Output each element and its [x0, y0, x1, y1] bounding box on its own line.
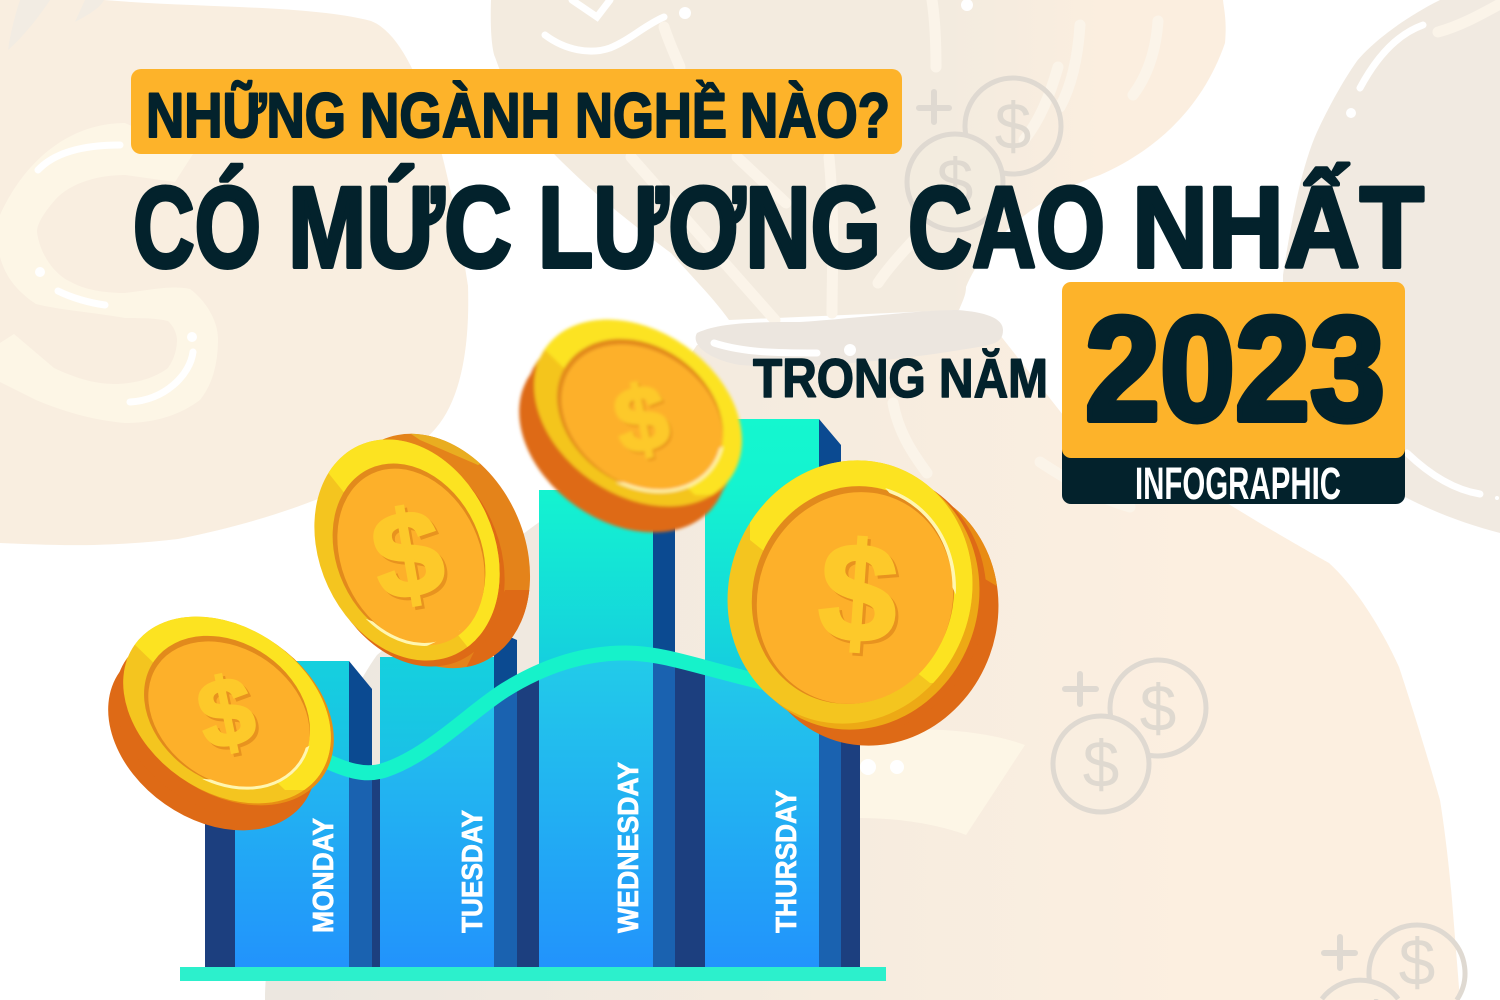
coin 2: $: [362, 482, 453, 627]
icon: dollar coins cluster bottom: [1322, 925, 1465, 1000]
coin 2: [314, 434, 530, 668]
bar: Thursday: THURSDAY: [771, 790, 803, 933]
background: bag top blob: [491, 0, 1226, 320]
background: large dollar S shape: [0, 123, 218, 423]
heading line 1: [146, 80, 890, 151]
coin 3 (blurred): $: [606, 364, 677, 475]
main title line 2: MỨC: [288, 164, 512, 292]
heading line 1: NÀO?: [740, 81, 890, 151]
bar: Monday: [205, 660, 380, 967]
bar: Monday: MONDAY: [308, 818, 340, 933]
bar: Tuesday: TUESDAY: [457, 810, 489, 933]
background: top right blob: [1283, 0, 1500, 533]
background blob: top left: [0, 0, 468, 545]
coin 4: [728, 460, 998, 746]
main title line 2: CAO: [908, 164, 1105, 292]
main title line 2: NHẤT: [1132, 164, 1424, 292]
coin 4: $: [817, 515, 906, 677]
background: bag neck band: [696, 310, 1003, 366]
year badge: [1062, 282, 1405, 509]
bar chart: Monday to Thursday: [180, 419, 886, 981]
coin 3 (blurred): [516, 316, 744, 535]
subtitle: TRONG NĂM: [753, 347, 1048, 409]
heading line 1: NHỮNG: [146, 80, 346, 151]
bar: Tuesday: [380, 630, 539, 967]
coin 1: [108, 616, 334, 830]
background: bag highlights: [545, 0, 1158, 320]
background: white dots: [860, 759, 904, 775]
year number: 2023: [1085, 287, 1385, 452]
coin 1: $: [189, 655, 263, 771]
icon: dollar coins cluster top: $: [995, 89, 1031, 163]
coin 2: $: [365, 485, 456, 630]
coin 4: $: [814, 512, 903, 674]
heading line 1: NGHỀ: [575, 80, 727, 151]
bar: Thursday: [705, 419, 860, 967]
background: neck highlight: [714, 343, 1130, 507]
background: lower paper shape: [860, 729, 1025, 835]
coin 3 (blurred): $: [608, 366, 679, 477]
coin 1: $: [192, 658, 266, 774]
icon: dollar coins cluster top: $: [937, 145, 973, 219]
trend line: [320, 653, 770, 773]
icon: dollar coins cluster bottom: $: [1399, 925, 1435, 999]
background: large lower blob: [265, 335, 1460, 1000]
bar: Wednesday: [539, 490, 705, 967]
heading line 1: NGÀNH: [360, 81, 560, 151]
background: right blob highlights: [1346, 4, 1500, 500]
icon: dollar coins cluster middle: $: [1140, 671, 1176, 745]
background: faded feathers: [8, 0, 104, 50]
bar: Wednesday: WEDNESDAY: [613, 762, 645, 933]
heading pill: [131, 69, 902, 154]
infographic label: INFOGRAPHIC: [1135, 458, 1341, 509]
chart baseline: [180, 967, 886, 981]
main title line 2: LƯƠNG: [538, 164, 881, 292]
S highlight strokes: [35, 145, 197, 402]
icon: dollar coins cluster middle: [1053, 660, 1206, 812]
main title line 2: CÓ: [133, 164, 261, 292]
icon: dollar coins cluster middle: $: [1083, 727, 1119, 801]
icon: dollar coins cluster top: [907, 78, 1061, 230]
main title line 2: [133, 164, 1424, 292]
